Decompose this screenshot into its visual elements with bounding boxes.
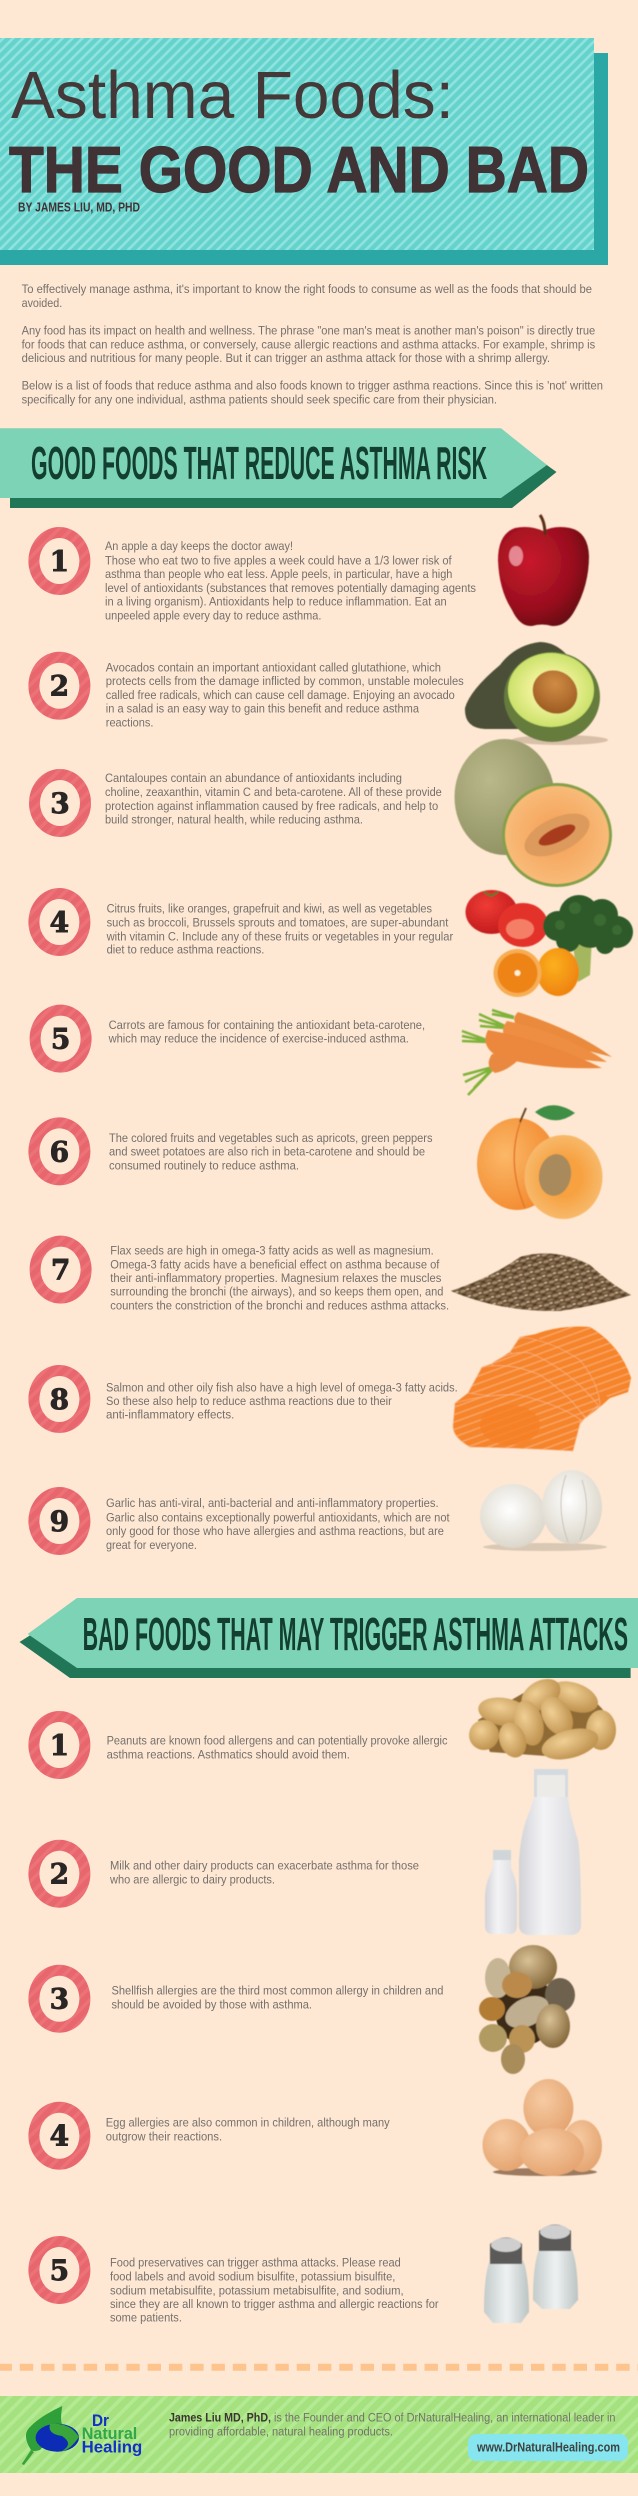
- text: apple: [105, 539, 476, 622]
- text: preservatives: food labels and avoid sodium bisulfite, potassium bisulfite,: [110, 2270, 395, 2284]
- text: avocado: in a salad is an easy way to gain this benefit and reduce asthma: [106, 702, 419, 716]
- bad item 5: preservatives: [28, 2224, 578, 2325]
- text: flax seeds: counters the constriction of the bronchi and reduces asthma attacks.: [110, 1299, 449, 1313]
- title: Asthma Foods: Asthma Foods:: [11, 58, 454, 133]
- text: preservatives: [110, 2256, 439, 2325]
- text: apple: asthma than people who eat less. Apple peels, in particular, have a high: [105, 567, 452, 581]
- text: citrus: [106, 902, 453, 957]
- bad item 4: eggs: [28, 2079, 602, 2176]
- text: eggs: [106, 2115, 390, 2143]
- item 8: salmon: [28, 1327, 631, 1451]
- number badge 7: [30, 1236, 92, 1304]
- text: peanuts: asthma reactions. Asthmatics should avoid them.: [107, 1747, 350, 1761]
- text: garlic: great for everyone.: [106, 1538, 197, 1552]
- intro text: specifically for any one individual, asthma patients should seek specific care from their physician.: [22, 392, 497, 406]
- number badge 6: [28, 1117, 90, 1185]
- intro text: To effectively manage asthma, it's important to know the right foods to consume as well as the foods that should be: [22, 282, 592, 296]
- footer bio text: providing affordable, natural healing products.: [169, 2425, 393, 2439]
- icon: carrots: [462, 1010, 612, 1095]
- icon: vegetables and citrus: [466, 890, 633, 997]
- text: apricots: consumed routinely to reduce asthma.: [109, 1158, 299, 1172]
- text: citrus: such as broccoli, Brussels sprouts and tomatoes, are super-abundant: [107, 915, 449, 929]
- text: preservatives: Food preservatives can trigger asthma attacks. Please read: [110, 2256, 401, 2270]
- text: carrots: which may reduce the incidence of exercise-induced asthma.: [108, 1032, 409, 1046]
- text: avocado: called free radicals, which can cause cell damage. Enjoying an avocado: [106, 688, 455, 702]
- number badge 3: 3: [50, 1983, 69, 2016]
- number badge 2: [28, 652, 90, 720]
- intro text: delicious and nutritious for many people. But it can trigger an asthma attack for those with a shrimp allergy.: [22, 351, 550, 365]
- bad item 2: milk: [28, 1769, 581, 1935]
- text: garlic: [106, 1496, 450, 1552]
- number badge 1: [28, 527, 90, 595]
- text: preservatives: some patients.: [110, 2311, 182, 2325]
- footer bio text: James Liu MD, PhD,: [169, 2411, 271, 2425]
- icon: cantaloupe: [454, 739, 612, 887]
- text: apricots: and sweet potatoes are also rich in beta-carotene and should be: [109, 1144, 425, 1158]
- intro text: [22, 282, 603, 406]
- icon: salt shakers: [484, 2224, 578, 2323]
- text: garlic: Garlic also contains exceptionally powerful antioxidants, which are not: [106, 1510, 450, 1524]
- text: flax seeds: surrounding the bronchi (the airways), and so keeps them open, and: [110, 1285, 443, 1299]
- dashed divider: [0, 2364, 638, 2371]
- text: apple: An apple a day keeps the doctor away!: [105, 539, 293, 553]
- number badge 9: [28, 1487, 90, 1555]
- text: cantaloupe: Cantaloupes contain an abundance of antioxidants including: [105, 771, 402, 785]
- text: salmon: [106, 1380, 458, 1422]
- item 6: apricots: [28, 1105, 602, 1219]
- icon: milk bottles: [485, 1769, 581, 1935]
- text: flax seeds: their anti-inflammatory properties. Magnesium relaxes the muscles: [110, 1271, 441, 1285]
- banner: good foods: [0, 428, 556, 508]
- number badge 5: [28, 2236, 90, 2304]
- number badge 3: [29, 769, 91, 837]
- footer bio text: [169, 2411, 616, 2439]
- text: milk: who are allergic to dairy products.: [109, 1872, 275, 1886]
- number badge 5: 5: [51, 1023, 70, 1056]
- logo wordmark: Dr: [92, 2412, 110, 2430]
- text: avocado: Avocados contain an important antioxidant called glutathione, which: [106, 660, 441, 674]
- text: preservatives: sodium metabisulfite, potassium metabisulfite, and sodium,: [110, 2283, 404, 2297]
- logo wordmark: Natural: [82, 2425, 137, 2443]
- number badge 4: [28, 2102, 90, 2170]
- text: apple: level of antioxidants (substances that removes potentially damaging agents: [105, 581, 476, 595]
- icon: eggs: [482, 2079, 602, 2176]
- text: citrus: diet to reduce asthma reactions.: [107, 943, 264, 957]
- number badge 7: 7: [51, 1254, 70, 1287]
- logo: Dr Natural Healing: [22, 2406, 142, 2465]
- text: shellfish: Shellfish allergies are the third most common allergy in children and: [112, 1983, 443, 1997]
- text: peanuts: Peanuts are known food allergens and can potentially provoke allergic: [107, 1733, 447, 1747]
- icon: peanuts: [469, 1672, 616, 1765]
- bad item 3: shellfish: [28, 1945, 575, 2074]
- text: carrots: Carrots are famous for containing the antioxidant beta-carotene,: [109, 1018, 425, 1032]
- text: salmon: Salmon and other oily fish also have a high level of omega-3 fatty acids.: [106, 1380, 458, 1394]
- text: salmon: So these also help to reduce asthma reactions due to their: [106, 1394, 392, 1408]
- number badge 3: 3: [50, 787, 70, 820]
- text: avocado: [106, 660, 464, 730]
- number badge 4: 4: [50, 2120, 69, 2153]
- icon: salmon: [453, 1327, 631, 1451]
- text: avocado: reactions.: [106, 716, 153, 730]
- website button: [468, 2434, 628, 2461]
- text: flax seeds: Omega-3 fatty acids have a beneficial effect on asthma because of: [110, 1257, 440, 1271]
- number badge 2: 2: [50, 670, 69, 703]
- text: apricots: The colored fruits and vegetables such as apricots, green peppers: [109, 1131, 432, 1145]
- text: flax seeds: [110, 1244, 449, 1313]
- number badge 1: 1: [50, 545, 69, 578]
- text: apple: Those who eat two to five apples a week could have a 1/3 lower risk of: [105, 553, 452, 567]
- text: shellfish: should be avoided by those with asthma.: [112, 1997, 312, 2011]
- intro text: avoided.: [22, 296, 62, 310]
- text: garlic: Garlic has anti-viral, anti-bacterial and anti-inflammatory properties.: [106, 1496, 439, 1510]
- number badge 5: [30, 1005, 92, 1073]
- icon: avocado: [465, 642, 608, 745]
- bad item 1: peanuts: [28, 1672, 616, 1779]
- text: peanuts: [107, 1733, 447, 1761]
- number badge 8: [28, 1365, 90, 1433]
- item 7: flax seeds: [30, 1236, 631, 1313]
- number badge 1: 1: [50, 1729, 69, 1762]
- byline: BY JAMES LIU, MD, PHD: [18, 200, 140, 214]
- item 2: avocado: [28, 642, 608, 745]
- number badge 2: [28, 1840, 90, 1908]
- logo wordmark: [82, 2412, 142, 2456]
- icon: apricots: [477, 1105, 602, 1219]
- icon: flax seeds: [451, 1253, 631, 1311]
- item 5: carrots: [30, 1005, 612, 1095]
- text: apple: unpeeled apple every day to reduce asthma.: [105, 608, 321, 622]
- item 3: cantaloupe: [29, 739, 612, 887]
- text: avocado: protects cells from the damage inflicted by common, unstable molecules: [106, 674, 464, 688]
- text: citrus: with vitamin C. Include any of these fruits or vegetables in your regular: [106, 929, 453, 943]
- text: apple: in a living organism). Antioxidants help to reduce inflammation. Eat an: [105, 594, 447, 608]
- text: cantaloupe: build stronger, natural health, while reducing asthma.: [105, 813, 363, 827]
- icon: apple: [498, 515, 589, 626]
- text: garlic: only good for those who have allergies and asthma reactions, but are: [106, 1524, 444, 1538]
- number badge 6: 6: [50, 1135, 69, 1168]
- text: milk: [109, 1858, 419, 1886]
- number badge 2: 2: [50, 1858, 69, 1891]
- text: salmon: anti-inflammatory effects.: [106, 1408, 234, 1422]
- item 4: citrus and vegetables: [28, 888, 633, 997]
- icon: shellfish: [479, 1945, 575, 2074]
- icon: garlic: [480, 1470, 607, 1551]
- number badge 9: 9: [50, 1505, 69, 1538]
- number badge 3: [28, 1965, 90, 2033]
- text: apricots: [109, 1131, 432, 1172]
- number badge 1: [28, 1711, 90, 1779]
- number badge 8: 8: [50, 1383, 69, 1416]
- text: cantaloupe: [105, 771, 442, 827]
- text: cantaloupe: protection against inflammation caused by free radicals, and help to: [105, 799, 438, 813]
- number badge 4: 4: [50, 906, 69, 939]
- text: shellfish: [112, 1983, 443, 2011]
- logo wordmark: Healing: [82, 2438, 142, 2456]
- text: eggs: Egg allergies are also common in children, although many: [106, 2115, 390, 2129]
- text: flax seeds: Flax seeds are high in omega-3 fatty acids as well as magnesium.: [110, 1244, 434, 1258]
- text: eggs: outgrow their reactions.: [106, 2129, 222, 2143]
- number badge 5: 5: [50, 2254, 69, 2287]
- text: citrus: Citrus fruits, like oranges, grapefruit and kiwi, as well as vegetables: [107, 902, 432, 916]
- header panel: [0, 38, 608, 265]
- text: preservatives: since they are all known to trigger asthma and allergic reactions for: [110, 2297, 439, 2311]
- text: cantaloupe: choline, zeaxanthin, vitamin C and beta-carotene. All of these provide: [105, 785, 442, 799]
- footer panel: [0, 2396, 638, 2473]
- item 9: garlic: [28, 1470, 607, 1555]
- text: carrots: [108, 1018, 425, 1046]
- text: milk: Milk and other dairy products can exacerbate asthma for those: [110, 1858, 419, 1872]
- banner: bad foods: [20, 1598, 638, 1678]
- item 1: apple: [28, 515, 589, 626]
- number badge 4: [28, 888, 90, 956]
